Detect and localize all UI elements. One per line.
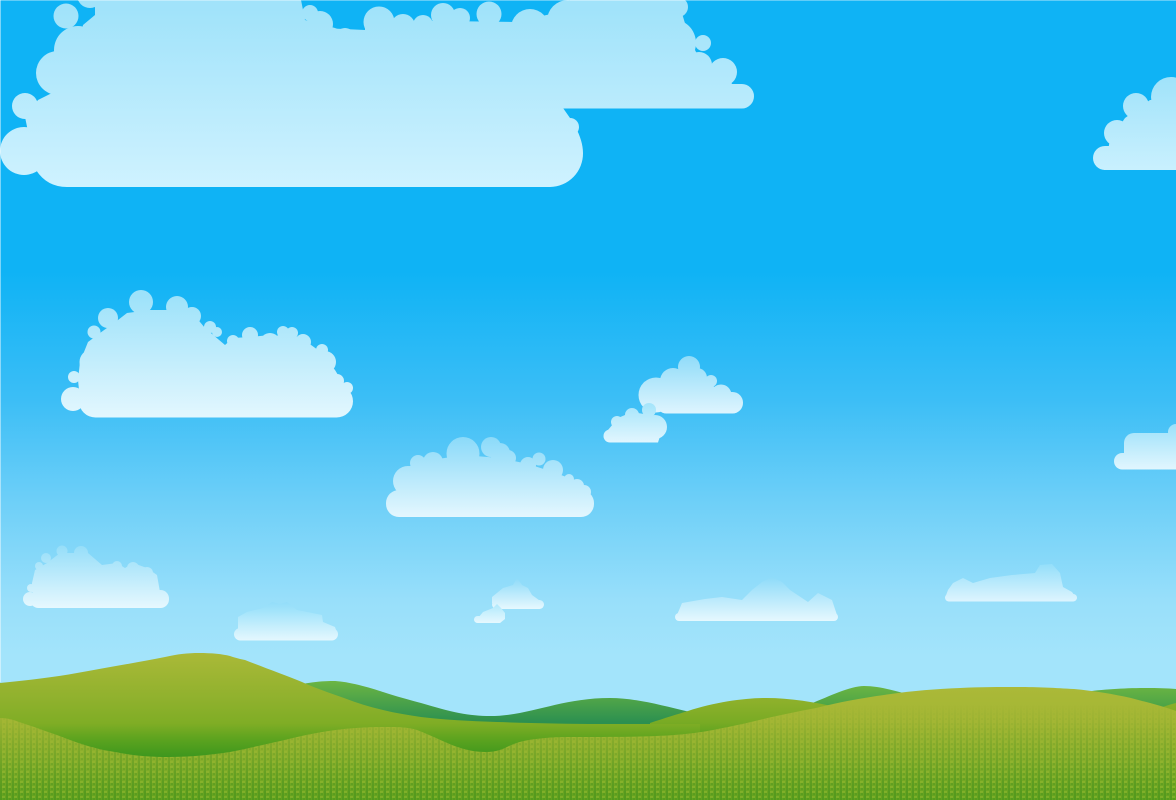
cloud: large upper cloud, extending to the right (300, 0, 754, 108)
cloud: centre medium (386, 437, 594, 517)
hills: distant dark green range (280, 681, 1176, 730)
cloud: large front cloud at top left (0, 0, 583, 187)
cloud: lower left (23, 546, 169, 608)
cloud: mid left large (61, 290, 353, 418)
cloud: centre right medium (638, 356, 743, 414)
cloud: far right middle (1114, 424, 1176, 470)
cloud: small faint pair, upper (492, 578, 544, 609)
cloud: small faint pair, lower (474, 604, 505, 623)
cloud: lower centre faint (675, 577, 838, 621)
hills: middle olive hills (0, 653, 1176, 760)
cloud: lower left faint (234, 602, 338, 640)
cloud: far right top (1093, 77, 1176, 170)
hills: front meadow (0, 687, 1176, 800)
cloud: lower right faint (945, 564, 1077, 602)
cloud: centre small (604, 403, 667, 442)
